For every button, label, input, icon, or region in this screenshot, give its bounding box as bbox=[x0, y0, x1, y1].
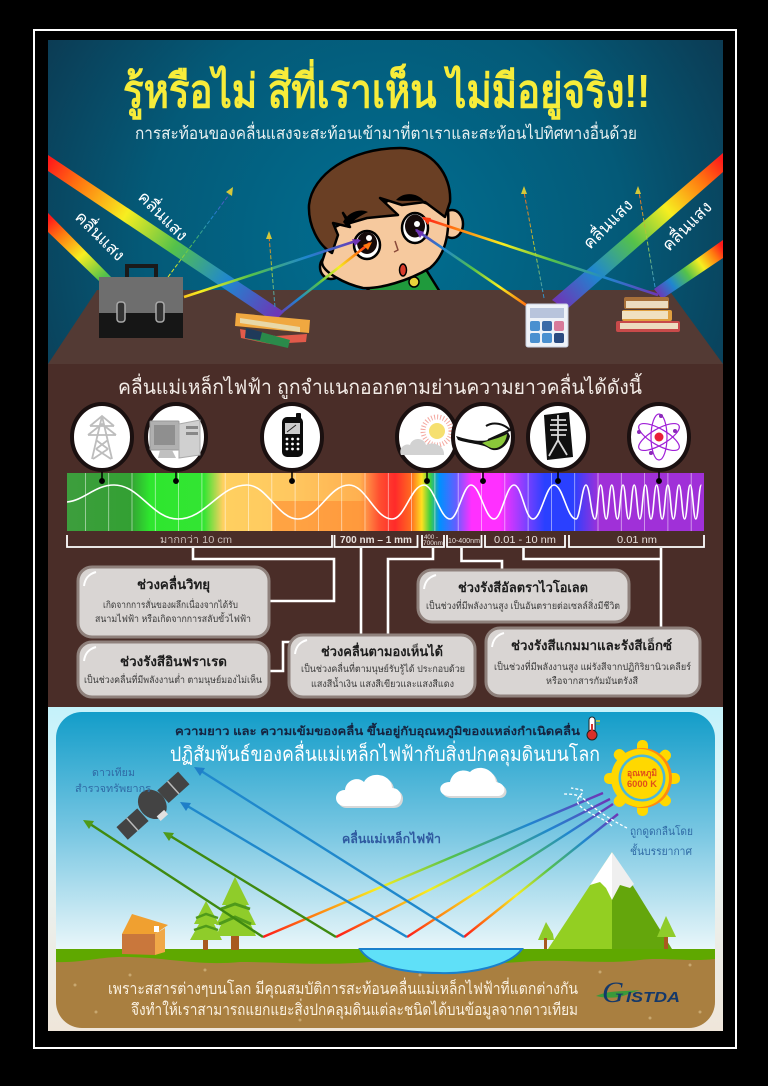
logo: GISTDA bbox=[596, 976, 680, 1009]
light beams bbox=[48, 153, 723, 322]
icon: books bbox=[616, 297, 680, 332]
label: satellite: สำรวจทรัพยากร bbox=[75, 783, 151, 795]
card: radio waves: เกิดจากการสั่นของผลึกเนื่องจากได้รับ bbox=[103, 598, 238, 611]
icon: power tower bbox=[72, 404, 132, 470]
card: visible light: ช่วงคลื่นตามองเห็นได้ bbox=[321, 642, 443, 659]
mountain bbox=[538, 852, 676, 949]
dashed scatter arrows bbox=[168, 186, 655, 307]
sun: 6000 K bbox=[627, 779, 658, 789]
card: ultraviolet: เป็นช่วงที่มีพลังงานสูง เป็นอันตรายต่อเซลล์สิ่งมีชีวิต bbox=[426, 599, 620, 612]
wavelength labels: 700nm bbox=[423, 541, 443, 547]
card: infrared bbox=[78, 642, 269, 697]
bottom explanatory text bbox=[108, 977, 578, 1020]
lake bbox=[360, 949, 522, 973]
trees bbox=[190, 877, 256, 950]
satellite bbox=[110, 765, 195, 846]
label: light wave left: คลื่นแสง bbox=[71, 205, 131, 265]
card: gamma and x-ray bbox=[486, 628, 700, 696]
label: satellite bbox=[75, 766, 151, 795]
icon: thermometer bbox=[587, 717, 600, 740]
label: light wave left: คลื่นแสง bbox=[134, 185, 194, 245]
reflected rays to eyes bbox=[184, 217, 658, 315]
ground and soil bbox=[56, 949, 715, 1029]
wavelength labels: 400 - bbox=[424, 535, 438, 541]
clouds bbox=[336, 768, 506, 808]
icon stems bbox=[100, 468, 661, 483]
icon: sun and cloud bbox=[397, 404, 457, 470]
icon: mobile phone bbox=[262, 404, 322, 470]
bottom explanatory text: จึงทำให้เราสามารถแยกแยะสิ่งปกคลุมดินแต่ละชนิดได้บนข้อมูลจากดาวเทียม bbox=[131, 998, 578, 1020]
card: radio waves: สนามไฟฟ้า หรือเกิดจากการสลับขั้วไฟฟ้า bbox=[95, 612, 251, 625]
card: visible light: เป็นช่วงคลื่นที่ตามนุษย์รับรู้ได้ ประกอบด้วย bbox=[301, 662, 465, 675]
panel: earth interaction section bbox=[48, 707, 723, 1031]
panel: top scene bbox=[48, 40, 723, 365]
wavelength labels: 700 nm – 1 mm bbox=[340, 535, 412, 546]
sun: อุณหภูมิ bbox=[627, 768, 657, 779]
label: light wave left: คลื่นแสง bbox=[577, 193, 637, 253]
house bbox=[122, 914, 168, 955]
label: electromagnetic wave: คลื่นแม่เหล็กไฟฟ้า bbox=[342, 830, 441, 846]
icon: atom bbox=[629, 404, 689, 470]
card: gamma and x-ray: เป็นช่วงที่มีพลังงานสูง แผ่รังสีจากปฏิกิริยานิวเคลียร์ bbox=[494, 660, 691, 673]
card: infrared: เป็นช่วงคลื่นที่มีพลังงานต่ำ ตามนุษย์มองไม่เห็น bbox=[84, 673, 262, 686]
card: gamma and x-ray: หรือจากสารกัมมันตรังสี bbox=[546, 675, 638, 687]
card: infrared: ช่วงรังสีอินฟราเรด bbox=[120, 654, 227, 669]
logo: GISTDA: ISTDA bbox=[626, 989, 680, 1006]
heading: interaction: ปฏิสัมพันธ์ของคลื่นแม่เหล็กไฟฟ้ากับสิ่งปกคลุมดินบนโลก bbox=[170, 740, 600, 767]
spectrum bar bbox=[67, 473, 704, 531]
label: light wave left bbox=[71, 185, 716, 265]
spectrum heading: คลื่นแม่เหล็กไฟฟ้า ถูกจำแนกออกตามย่านความยาวคลื่นได้ดังนี้ bbox=[118, 373, 642, 400]
card: visible light bbox=[289, 635, 475, 697]
panel: spectrum section bbox=[48, 364, 723, 707]
connector lines bbox=[193, 548, 661, 671]
table bbox=[48, 290, 723, 364]
wavelength labels: 10-400nm bbox=[448, 538, 480, 545]
card: ultraviolet bbox=[418, 570, 629, 622]
icon: goggles bbox=[453, 404, 513, 470]
label: light wave left: คลื่นแสง bbox=[656, 195, 716, 255]
text: wavelength depends on temperature: ความยาว และ ความเข้มของคลื่น ขึ้นอยู่กับอุณหภูมิของแหล่งกำเนิดคลื่น bbox=[175, 722, 580, 739]
card: ultraviolet: ช่วงรังสีอัลตราไวโอเลต bbox=[458, 579, 588, 595]
icon: ruler and pencil case bbox=[235, 313, 310, 348]
wavelength labels: 0.01 - 10 nm bbox=[494, 535, 556, 546]
label: absorbed by atmosphere: ถูกดูดกลืนโดย bbox=[630, 824, 693, 838]
icon: x-ray film bbox=[528, 404, 588, 470]
label: absorbed by atmosphere bbox=[630, 824, 693, 858]
label: absorbed by atmosphere: ชั้นบรรยากาศ bbox=[630, 843, 692, 858]
label: satellite: ดาวเทียม bbox=[92, 766, 135, 779]
figure: boy bbox=[309, 148, 463, 292]
reflected rays to satellite bbox=[83, 767, 464, 937]
title: รู้หรือไม่ สีที่เราเห็น ไม่มีอยู่จริง!! bbox=[123, 59, 650, 120]
card: gamma and x-ray: ช่วงรังสีแกมมาและรังสีเอ็กซ์ bbox=[511, 636, 672, 653]
rays from sun bbox=[263, 793, 618, 937]
card: radio waves bbox=[78, 567, 269, 637]
logo: GISTDA: G bbox=[602, 976, 624, 1009]
wavelength labels bbox=[160, 535, 657, 547]
card: visible light: แสงสีน้ำเงิน แสงสีเขียวและแสงสีแดง bbox=[311, 677, 454, 690]
bottom explanatory text: เพราะสสารต่างๆบนโลก มีคุณสมบัติการสะท้อนคลื่นแม่เหล็กไฟฟ้าที่แตกต่างกัน bbox=[108, 977, 578, 999]
wavelength labels: มากกว่า 10 cm bbox=[160, 535, 232, 546]
icon: calculator bbox=[526, 304, 568, 347]
wavelength brackets bbox=[67, 535, 704, 547]
sun bbox=[604, 740, 680, 816]
absorption dashed arrows bbox=[563, 788, 627, 828]
subtitle: การสะท้อนของคลื่นแสงจะสะท้อนเข้ามาที่ตาเราและสะท้อนไปทิศทางอื่นด้วย bbox=[135, 121, 637, 143]
icon: bag bbox=[99, 266, 183, 338]
card: radio waves: ช่วงคลื่นวิทยุ bbox=[137, 575, 210, 593]
wavelength labels: 0.01 nm bbox=[617, 535, 657, 546]
icon: computer bbox=[146, 404, 206, 470]
